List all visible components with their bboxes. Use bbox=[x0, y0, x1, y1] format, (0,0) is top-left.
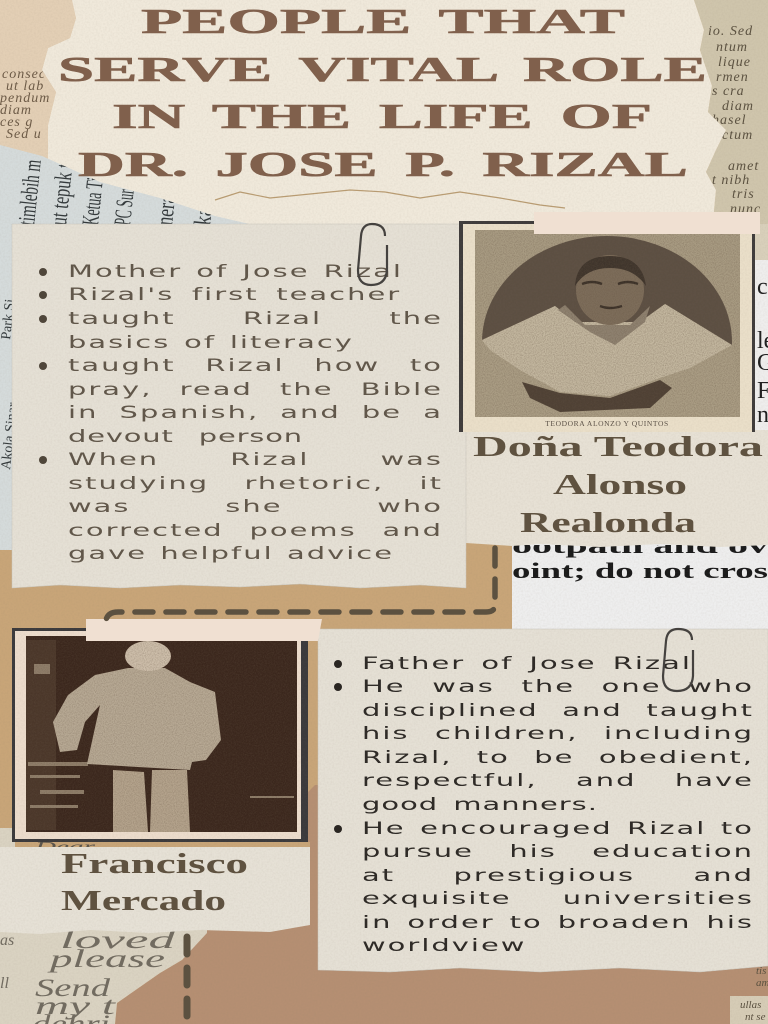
info panel: father bbox=[318, 629, 768, 972]
name: Francisco Mercado: Mercado bbox=[61, 885, 226, 917]
tape: top portrait bbox=[534, 212, 760, 234]
kraft paper: bottom: tis bbox=[756, 965, 766, 977]
title: PEOPLE THAT bbox=[141, 2, 625, 41]
white newspaper: middle right bbox=[512, 544, 768, 629]
newspaper scrap: left: PC Sur bbox=[110, 188, 140, 227]
name: Doña Teodora Alonso Realonda: Realonda bbox=[520, 507, 697, 539]
white newspaper: right of portrait: c bbox=[757, 274, 768, 300]
newspaper scrap: left: kar bbox=[190, 200, 218, 227]
bullet list: father: pursue his education bbox=[362, 842, 754, 862]
torn paper: top left: pendum bbox=[0, 91, 50, 106]
newspaper scrap: left: Ketua Ti bbox=[78, 176, 109, 227]
torn paper: top left bbox=[0, 0, 76, 160]
bullet list: father: He encouraged Rizal to bbox=[362, 819, 754, 839]
name: Francisco Mercado bbox=[61, 848, 248, 917]
torn paper: top right: s cra bbox=[712, 84, 745, 99]
torn paper: top left: diam bbox=[0, 103, 32, 118]
newspaper scrap: left bbox=[0, 145, 258, 550]
handwritten letter scrap: Send bbox=[35, 975, 111, 1002]
title: DR. JOSE P. RIZAL bbox=[78, 145, 688, 184]
handwriting scrap above name strip bbox=[0, 828, 310, 855]
torn paper: top right bbox=[694, 0, 768, 232]
name: Doña Teodora Alonso Realonda: Doña Teodora bbox=[473, 431, 764, 463]
handwritten letter scrap: please bbox=[46, 946, 165, 973]
bullet list: mother: When Rizal was bbox=[68, 450, 443, 470]
text block: facts about the mother bbox=[39, 262, 443, 564]
torn paper: top right: io. Sed bbox=[708, 24, 753, 39]
newspaper scrap: left: nera bbox=[152, 194, 181, 227]
tape: lower portrait bbox=[86, 619, 322, 641]
torn paper: top right: diam bbox=[722, 99, 754, 114]
bullet list: father: He was the one who bbox=[362, 677, 754, 697]
torn paper: top left: ut lab bbox=[6, 79, 44, 94]
handwriting scrap above name strip: Dear bbox=[33, 840, 96, 855]
white newspaper: middle right: oint; do not cros bbox=[512, 558, 768, 583]
handwritten letter scrap: my t bbox=[35, 993, 117, 1020]
newspaper scrap: left: ut tepuk t bbox=[46, 162, 78, 227]
bullet list: mother: corrected poems and bbox=[68, 521, 443, 541]
name strip: Doña Teodora bbox=[458, 430, 768, 547]
bullet list: mother: basics of literacy bbox=[68, 333, 354, 353]
bullet list: father: good manners. bbox=[362, 795, 598, 815]
torn paper: top right: ctum bbox=[722, 128, 753, 143]
title bbox=[58, 2, 707, 184]
handwritten letter scrap: loved bbox=[60, 927, 176, 954]
torn paper: top right: nunc bbox=[730, 202, 761, 217]
handwritten letter scrap: as bbox=[0, 932, 14, 949]
bullet list: father: Rizal, to be obedient, bbox=[362, 748, 754, 768]
torn paper: top right: amet bbox=[728, 159, 759, 174]
torn paper: top left: Sed u bbox=[6, 127, 42, 142]
torn paper: top right: t nibh bbox=[712, 173, 750, 188]
bullet list: mother: studying rhetoric, it bbox=[68, 474, 443, 494]
torn paper: top right: hasel bbox=[712, 113, 747, 128]
bullet list: father: worldview bbox=[362, 936, 527, 956]
torn paper: top right: ntum bbox=[716, 40, 748, 55]
bullet list: mother: Mother of Jose Rizal bbox=[68, 262, 403, 282]
bullet list: father: respectful, and have bbox=[362, 771, 754, 791]
handwritten letter scrap bbox=[0, 925, 207, 1024]
portrait: Teodora Alonso: TEODORA ALONZO Y QUINTOS bbox=[545, 419, 669, 428]
title: SERVE VITAL ROLE bbox=[58, 50, 707, 89]
name strip: Francisco Mercado bbox=[0, 847, 310, 934]
portrait: Teodora Alonso bbox=[459, 221, 755, 448]
kraft paper: bottom: ullas bbox=[740, 999, 761, 1011]
bullet list: father: at prestigious and bbox=[362, 866, 754, 886]
text block: facts about the father bbox=[334, 654, 754, 956]
newspaper scrap: left: timlebih m bbox=[14, 158, 47, 227]
name: Doña Teodora Alonso Realonda: Alonso bbox=[553, 469, 687, 501]
bullet list: mother: in Spanish, and be a bbox=[68, 403, 443, 423]
torn paper: top right: lique bbox=[718, 55, 751, 70]
name: Doña Teodora Alonso Realonda bbox=[473, 431, 764, 539]
title: IN THE LIFE OF bbox=[112, 97, 652, 136]
name: Francisco Mercado: Francisco bbox=[61, 848, 248, 880]
dashed connector: lower bbox=[184, 937, 190, 1024]
dashed connector: upper bbox=[106, 548, 495, 620]
bullet list: mother: devout person bbox=[68, 427, 303, 447]
torn paper: title sheet bbox=[40, 0, 726, 232]
torn paper: top right: rmen bbox=[716, 70, 749, 85]
handwritten letter scrap: ll bbox=[0, 975, 9, 992]
bullet list: father: exquisite universities bbox=[362, 889, 754, 909]
bullet list: mother bbox=[39, 262, 443, 564]
bullet list: mother: taught Rizal how to bbox=[68, 356, 443, 376]
bullet list: mother: Rizal's first teacher bbox=[68, 285, 401, 305]
bullet list: father: in order to broaden his bbox=[362, 913, 754, 933]
kraft paper: bottom bbox=[115, 785, 768, 1024]
white newspaper: right of portrait bbox=[755, 224, 768, 430]
portrait: Francisco Mercado bbox=[12, 628, 308, 842]
paperclip: father panel bbox=[663, 629, 693, 691]
torn paper: top left: consect bbox=[2, 67, 51, 82]
paperclip: mother panel bbox=[358, 224, 387, 285]
bullet list: father: disciplined and taught bbox=[362, 701, 754, 721]
bullet list: mother: pray, read the Bible bbox=[68, 380, 443, 400]
torn paper: top left: ces g bbox=[0, 115, 33, 130]
bullet list: mother: gave helpful advice bbox=[68, 544, 394, 564]
info panel: mother bbox=[12, 224, 466, 588]
torn paper: top right: tris bbox=[732, 187, 755, 202]
white newspaper: middle right: ootpath and ov bbox=[512, 533, 768, 558]
bullet list: father: his children, including bbox=[362, 724, 754, 744]
bullet list: father: Father of Jose Rizal bbox=[362, 654, 692, 674]
kraft paper: bottom: nt se bbox=[745, 1011, 766, 1023]
bullet list: mother: was she who bbox=[68, 497, 443, 517]
bullet list: mother: taught Rizal the bbox=[68, 309, 443, 329]
bullet list: father bbox=[334, 654, 754, 956]
